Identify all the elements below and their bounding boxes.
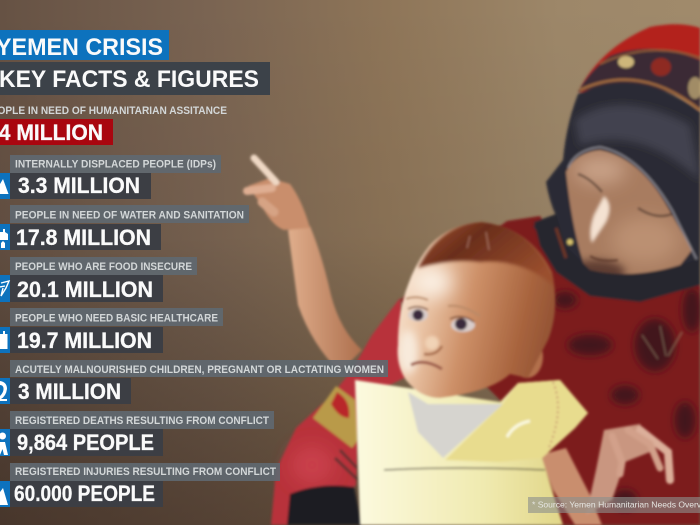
child hair [416, 220, 552, 283]
collar [408, 392, 503, 458]
hood red [578, 24, 700, 92]
child raised arm [288, 226, 362, 372]
dark sleeve [287, 486, 362, 525]
hood pattern band [578, 49, 700, 110]
stat: IDPs [0, 155, 221, 199]
stat: deaths: 9,864 PEOPLE [17, 430, 154, 455]
stat: malnourished: 3 MILLION [18, 379, 121, 404]
dark scarf [533, 83, 700, 292]
stat: healthcare [0, 308, 223, 353]
child eyes [406, 297, 480, 332]
yellow shoulder pattern [313, 386, 358, 448]
dress seam [548, 382, 558, 450]
icon: figure [0, 429, 10, 456]
icon: person [0, 378, 10, 404]
stat: malnourished: ACUTELY MALNOURISHED CHILDREN, PREGNANT OR LACTATING WOMEN [15, 364, 384, 376]
dress [355, 380, 588, 525]
stat: injuries: 60.000 PEOPLE [14, 481, 155, 506]
stat: injuries [0, 463, 280, 507]
photo: child [247, 158, 670, 525]
stat: water: PEOPLE IN NEED OF WATER AND SANITATION [15, 210, 244, 222]
stat: water: 17.8 MILLION [16, 225, 151, 250]
child ear [511, 336, 543, 378]
stat: deaths [0, 411, 274, 456]
stat: healthcare: 19.7 MILLION [17, 328, 152, 353]
stat: water [0, 205, 249, 250]
source note [528, 497, 700, 513]
icon: medical kit [0, 327, 10, 353]
stat: healthcare: PEOPLE WHO NEED BASIC HEALTHCARE [15, 312, 218, 324]
icon: tent [0, 173, 10, 199]
stat: food: 20.1 MILLION [17, 277, 153, 302]
child right arm [540, 448, 602, 525]
stat: injuries: REGISTERED INJURIES RESULTING FROM CONFLICT [15, 466, 276, 478]
icon: food [0, 275, 10, 302]
child raised hand [247, 158, 310, 230]
mother sleeve [271, 298, 410, 525]
mother garment [400, 216, 700, 525]
face highlight [590, 196, 610, 243]
dress line [384, 468, 545, 470]
garment pattern [553, 288, 700, 510]
icon: water tap [0, 224, 10, 250]
title: Key Facts & Figures: KEY FACTS & FIGURES [0, 66, 259, 93]
stat: food [0, 257, 197, 302]
child lower hand [586, 424, 670, 515]
stat: malnourished [0, 360, 388, 404]
stat: deaths: REGISTERED DEATHS RESULTING FROM CONFLICT [15, 415, 269, 427]
mother face [564, 148, 693, 276]
stat: food: PEOPLE WHO ARE FOOD INSECURE [15, 261, 192, 273]
child nose and mouth [425, 336, 439, 350]
neck scarf [534, 214, 700, 302]
stat: IDPs: 3.3 MILLION [18, 173, 140, 198]
icon: injured person [0, 481, 10, 507]
stat: IDPs: INTERNALLY DISPLACED PEOPLE (IDPs) [15, 158, 216, 170]
title: Yemen Crisis: YEMEN CRISIS [0, 34, 163, 61]
photo: mother [271, 24, 700, 525]
child head [396, 220, 556, 400]
